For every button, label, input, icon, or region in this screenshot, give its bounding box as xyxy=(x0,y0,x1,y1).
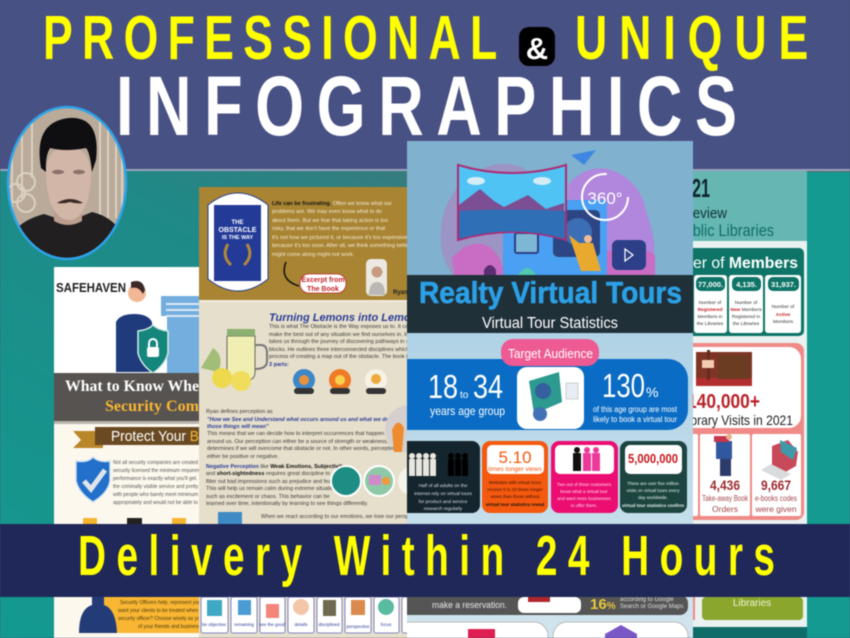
card: 5-10 times longer views: times longer views xyxy=(488,466,542,473)
text block: life can be frustrating: because it's too soon. After all, we think something better xyxy=(272,243,411,249)
heading: 2021 review xyxy=(692,178,774,236)
panel: target audience xyxy=(396,339,688,430)
panel: number of members: Number of xyxy=(735,300,758,306)
panel: number of members: 31,937. xyxy=(771,280,796,289)
panel: number of members: Number of xyxy=(772,304,795,310)
heading: professional: PROFESSIONAL xyxy=(43,4,497,73)
text block: perception: either be positive or negative. xyxy=(207,454,279,460)
heading: infographics: INFOGRAPHICS xyxy=(116,59,737,153)
illustration: marketing xyxy=(529,372,578,421)
text block: obstacle intro: This is what The Obstacle is the Way exposes us to. It capitalizes xyxy=(269,324,428,330)
ampersand badge xyxy=(519,27,555,66)
panel: library visits xyxy=(680,343,804,520)
card: half of adults: Half of all adults on the xyxy=(419,483,468,489)
illustration: security guard and shield xyxy=(116,281,199,373)
callout: security officers: want your clients to be treated when xyxy=(118,608,198,614)
header background xyxy=(0,0,850,170)
panel: library visits: 140,000+ xyxy=(687,391,760,413)
icon cards row: perspective xyxy=(346,624,370,629)
subheading: lemons: Turning Lemons into Lemonade xyxy=(269,312,436,324)
panel: the obstacle is the way xyxy=(198,186,408,638)
banner: delivery within 24 hours: Delivery Within 24 Hours xyxy=(78,525,775,588)
card: half of adults: internet rely on virtual tours xyxy=(414,491,473,497)
title band: Realty Virtual Tours xyxy=(419,275,682,310)
text block: intro: with people who barely meet minimum stand xyxy=(113,492,212,498)
text block: negative perception: filter out bad impressions such as prejudice and fear. xyxy=(206,479,335,485)
stat: 18 to 34: to xyxy=(460,390,469,401)
card: half of adults xyxy=(396,441,480,513)
panel: number of members: 4,135. xyxy=(736,280,757,289)
text block: perception xyxy=(206,409,407,460)
icon cards row: remaining xyxy=(234,622,254,627)
stat: 18 to 34 xyxy=(428,368,505,418)
book cover: THE xyxy=(232,220,244,226)
title band: Security Com xyxy=(105,398,200,415)
stat: 18 to 34: years age group xyxy=(430,404,505,418)
pill: target audience xyxy=(501,339,599,366)
panel: security infographic xyxy=(54,267,213,638)
panel: number of members: Number of xyxy=(699,300,722,306)
icon: blue shield check xyxy=(76,457,110,502)
panel: number of members: Registered xyxy=(698,307,722,313)
book cover: IS THE WAY xyxy=(222,235,253,241)
callout: security officers: Security Officers help, represent your xyxy=(120,600,203,606)
arrow xyxy=(284,262,299,286)
icon: e-book stack xyxy=(761,440,798,480)
card: two out of three: to offer them. xyxy=(571,503,597,508)
text block: obstacle intro: takes us through the journey of discovering pathways in stumbling xyxy=(269,339,430,345)
card: two out of three: Two out of three customers xyxy=(557,482,612,487)
illustration: figure in circle xyxy=(385,406,408,453)
text block: life can be frustrating: might come along might not work. xyxy=(272,252,355,258)
text block: life can be frustrating: risky, that we don't have the experience or that xyxy=(272,226,386,232)
text block: negative perception: learned over time, intentionally by learning to see things differently. xyxy=(206,501,369,507)
panel: number of members: Active xyxy=(776,312,791,318)
panel: library visits: 4,436 xyxy=(710,477,740,493)
heading: unique: UNIQUE xyxy=(575,4,808,73)
panel: number of members: Members xyxy=(773,319,794,325)
illustration: 360 virtual tour: 360° xyxy=(587,189,623,208)
illustration: library shelves xyxy=(696,350,752,386)
logo: safehaven: SAFEHAVEN xyxy=(56,280,126,295)
text block: intro: appropriately and would not be able to pro xyxy=(113,500,207,506)
panel: virtual tours xyxy=(396,141,693,638)
bottom white cards xyxy=(396,622,688,638)
author portrait xyxy=(366,259,414,296)
text block: obstacle intro: 3 parts: xyxy=(269,362,289,368)
text block: obstacle intro: blocks. He outlines three interconnected disciplines which form a xyxy=(269,347,427,353)
stat: 130 percent: 130 xyxy=(602,367,645,404)
card: 5-10 times longer views: views than those without xyxy=(490,494,540,499)
icon cards row: disciplined xyxy=(318,622,340,627)
icons: perception circles xyxy=(331,466,428,496)
text block: negative perception xyxy=(206,464,369,507)
grey stats bar: make a reservation. xyxy=(432,600,507,610)
grey stats bar: 16% xyxy=(590,596,616,613)
text block: life can be frustrating: it's not how we pictured it, or because it's too expensive xyxy=(272,235,407,241)
title band: What to Know Whe xyxy=(65,378,199,395)
text block: perception: around us. Our perception can either be a source of strength or weakness, as this xyxy=(207,439,406,445)
panel: library visits: Take-away Book xyxy=(702,493,749,503)
panel: library visits: 9,667 xyxy=(761,477,791,493)
panel: library review xyxy=(692,170,808,638)
icon cards row xyxy=(201,597,422,633)
author portrait: Ryan H xyxy=(393,290,414,296)
heading: 2021 review: 2021 xyxy=(674,173,710,203)
card: 5-10 times longer views: receive 5 to 10 times longer xyxy=(487,487,543,492)
card: 5,000,000 visits: 5,000,000 xyxy=(628,451,678,466)
heading: 2021 review: Public Libraries xyxy=(675,221,774,240)
card: 5,000,000 visits: day worldwide. xyxy=(638,495,668,500)
panel: libraries green box xyxy=(693,597,803,620)
stat: 130 percent: % xyxy=(646,384,658,400)
card: 5-10 times longer views xyxy=(482,441,548,513)
card: 5-10 times longer views: Websites with virtual tours xyxy=(489,480,542,485)
panel: number of members: New Members xyxy=(730,307,762,313)
panel: number of members xyxy=(680,248,804,336)
ribbon: protect your business: Protect Your B xyxy=(111,428,199,445)
book cover: OBSTACLE xyxy=(219,227,257,234)
icon row xyxy=(83,518,186,526)
badge: excerpt from the book: Excerpt from xyxy=(301,277,345,284)
text block: obstacle intro: process of creating a map out of the obstacle. The book is divided xyxy=(269,354,429,360)
text block: life can be frustrating: about them. But we fear that taking action is too xyxy=(272,218,388,224)
icon cards row: focus xyxy=(381,622,392,627)
card: two out of three xyxy=(551,441,618,513)
panel: libraries green box: Libraries xyxy=(733,598,771,609)
card: 5-10 times longer views: virtual tour statistics reveal xyxy=(486,502,544,507)
card: 5,000,000 visits: visits on virtual tours every xyxy=(626,488,680,493)
grey stats bar: according to Google xyxy=(620,597,674,603)
text block: perception: those things will mean" xyxy=(207,424,269,430)
panel: library visits: Orders xyxy=(712,504,738,514)
callout: security officers: of your friends and business xyxy=(138,624,201,630)
card: half of adults: for product and service xyxy=(419,499,468,505)
text block: life can be frustrating: problems are. We may even know what to do xyxy=(272,209,382,215)
text block: negative perception: This will help us remain calm during extreme situations xyxy=(206,486,340,492)
icon cards row: see the good xyxy=(259,622,286,627)
text block: negative perception: and short-sightedness requires great discipline to xyxy=(206,471,330,477)
panel: number of members: Members in xyxy=(697,314,723,320)
text block: intro: the criminally visible service and pretty xyxy=(113,484,199,490)
card: 5,000,000 visits xyxy=(620,441,687,513)
text block: perception: determines if we will overcome that obstacle or not. In other words, perception can xyxy=(207,446,407,452)
panel: number of members: Registered in xyxy=(732,314,760,320)
grey stats bar: Search or Google Maps xyxy=(620,604,683,610)
footer strip xyxy=(693,627,807,638)
illustration: 360 virtual tour xyxy=(441,150,655,277)
text block: perception: Ryan defines perception as xyxy=(206,409,273,415)
text block: obstacle intro xyxy=(268,323,408,368)
text block: negative perception: such as excitement or chaos. This behavior can be xyxy=(206,494,330,500)
stat: 130 percent: likely to book a virtual tour xyxy=(593,415,677,424)
panel: number of members: the Libraries xyxy=(733,321,760,327)
badge: excerpt from the book xyxy=(300,274,346,293)
illustration: lemonade jar xyxy=(201,329,267,391)
text block: perception: "How we See and Understand what occurs around us and what we decide xyxy=(207,417,400,423)
panel: number of members: 77,000. xyxy=(698,280,723,289)
text block: obstacle intro: make the best out of any situation we find ourselves in. In this xyxy=(269,332,419,338)
card: two out of three: and want more businesses xyxy=(557,496,612,501)
text block: perception: This means that we can decide how to interpret occurrences that happen to and xyxy=(207,431,401,437)
icon: person with books xyxy=(714,434,732,476)
title band xyxy=(54,373,200,424)
panel: number of members: the Libraries xyxy=(697,321,724,327)
stat: 18 to 34: 34 xyxy=(473,368,503,405)
panel: library visits: were given xyxy=(754,504,797,514)
book cover xyxy=(208,193,268,291)
text block: intro xyxy=(112,460,200,506)
callout: security officers: security officer? Choose wisely as you xyxy=(118,616,203,622)
card: 5,000,000 visits: There are over five million xyxy=(627,481,679,486)
title band: Virtual Tour Statistics xyxy=(482,315,618,332)
icons: three parts xyxy=(293,369,387,394)
panel: library visits: Library Visits in 2021 xyxy=(681,412,793,428)
card: 5,000,000 visits: virtual tour statistics confirm xyxy=(622,503,684,508)
callout: security officers xyxy=(79,597,203,633)
badge: excerpt from the book: The Book xyxy=(307,286,339,293)
portrait photo xyxy=(7,106,127,262)
text block: emotions: When we react according to our emotions, we lose our perspective xyxy=(261,514,423,520)
text block: intro: performance is exactly what you'll get. Some xyxy=(113,476,212,482)
panel: number of members: er of Members xyxy=(693,255,798,272)
panel: library visits: e-books codes xyxy=(755,493,797,503)
card: two out of three: know what a virtual tour xyxy=(560,489,608,494)
ampersand badge: & xyxy=(526,31,548,66)
stat: 18 to 34: 18 xyxy=(428,368,458,405)
teal background xyxy=(0,169,850,638)
heading: 2021 review: Review xyxy=(683,205,727,222)
card: 5-10 times longer views: 5.10 xyxy=(498,448,532,467)
ribbon: protect your business xyxy=(73,427,199,448)
icon cards row: details xyxy=(294,622,308,627)
stat: 130 percent xyxy=(593,367,678,424)
text block: life can be frustrating xyxy=(272,201,411,258)
title band xyxy=(407,275,693,333)
text block: emotions xyxy=(218,512,423,524)
text block: negative perception: Negative Perception like Weak Emotions, Subjectivity, xyxy=(206,464,347,470)
stat: 130 percent: of this age group are most xyxy=(593,405,678,414)
pill: target audience: Target Audience xyxy=(508,346,593,361)
text block: intro: Not all security companies are created equal, xyxy=(113,460,213,466)
card: half of adults: research regularly xyxy=(424,506,463,512)
grey stats bar xyxy=(396,595,688,615)
text block: intro: security licensed the minimum requirements xyxy=(113,468,211,474)
text block: life can be frustrating: Life can be frustrating. Often we know what our xyxy=(272,201,392,207)
icon cards row: be objective xyxy=(202,622,226,627)
